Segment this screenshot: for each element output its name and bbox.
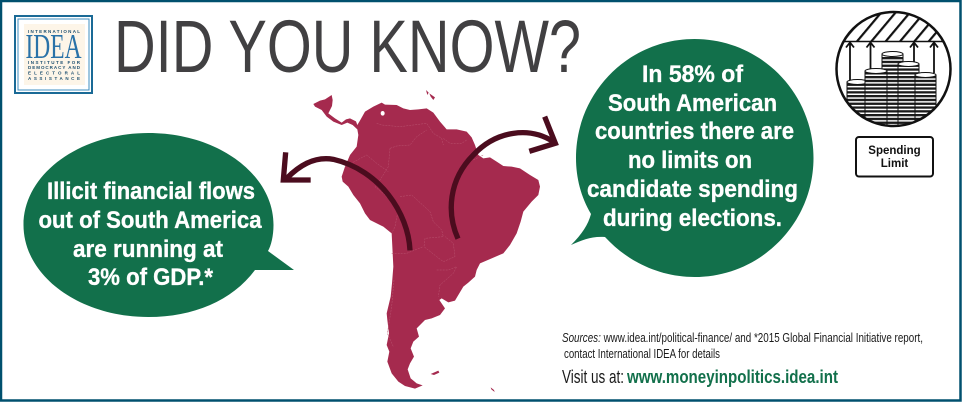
map: islands bbox=[426, 90, 495, 392]
bubble text: illicit flows: are running at bbox=[73, 236, 223, 263]
bubble text: 58 percent: no limits on bbox=[628, 147, 752, 174]
bubble text: 58 percent: candidate spending bbox=[587, 176, 798, 203]
bubble text: 58 percent: South American bbox=[608, 90, 777, 117]
bubble text: 58 percent bbox=[587, 61, 798, 232]
visit us link: www.moneyinpolitics.idea.int bbox=[626, 366, 838, 387]
bubble text: illicit flows bbox=[38, 178, 262, 291]
visit us link: Visit us at: bbox=[562, 366, 624, 387]
sources note bbox=[562, 331, 923, 361]
bubble text: illicit flows: out of South America bbox=[38, 207, 262, 234]
icon: spending limit bbox=[834, 10, 954, 176]
logo: International IDEA: INTERNATIONAL bbox=[28, 29, 80, 34]
visit us link bbox=[562, 366, 838, 387]
logo: International IDEA: DEMOCRACY AND bbox=[28, 65, 81, 70]
bubble text: 58 percent: during elections. bbox=[603, 205, 782, 232]
icon label box: Limit bbox=[881, 158, 908, 170]
speech bubble: right bbox=[571, 39, 814, 277]
map: South America with arrows bbox=[283, 90, 555, 392]
bubble text: illicit flows: 3% of GDP.* bbox=[88, 264, 214, 291]
map: country borders bbox=[345, 123, 483, 347]
bubble text: 58 percent: In 58% of bbox=[642, 61, 744, 88]
icon label box bbox=[856, 137, 933, 176]
arrow: right bbox=[451, 117, 555, 239]
speech bubble: left bbox=[24, 133, 294, 317]
logo: International IDEA: IDEA bbox=[26, 27, 82, 66]
logo: International IDEA: ASSISTANCE bbox=[28, 76, 80, 81]
map outline bbox=[313, 95, 540, 389]
logo: International IDEA: ELECTORAL bbox=[28, 70, 80, 76]
arrow: left bbox=[283, 152, 410, 250]
sources note: contact International IDEA for details bbox=[564, 347, 720, 361]
bubble text: 58 percent: countries there are bbox=[595, 118, 794, 145]
bubble text: illicit flows: Illicit financial flows bbox=[47, 178, 255, 205]
logo: International IDEA: INSTITUTE FOR bbox=[28, 60, 81, 65]
logo: International IDEA bbox=[15, 16, 92, 93]
title: DID YOU KNOW? bbox=[114, 5, 581, 88]
icon label box: Spending bbox=[868, 145, 921, 157]
